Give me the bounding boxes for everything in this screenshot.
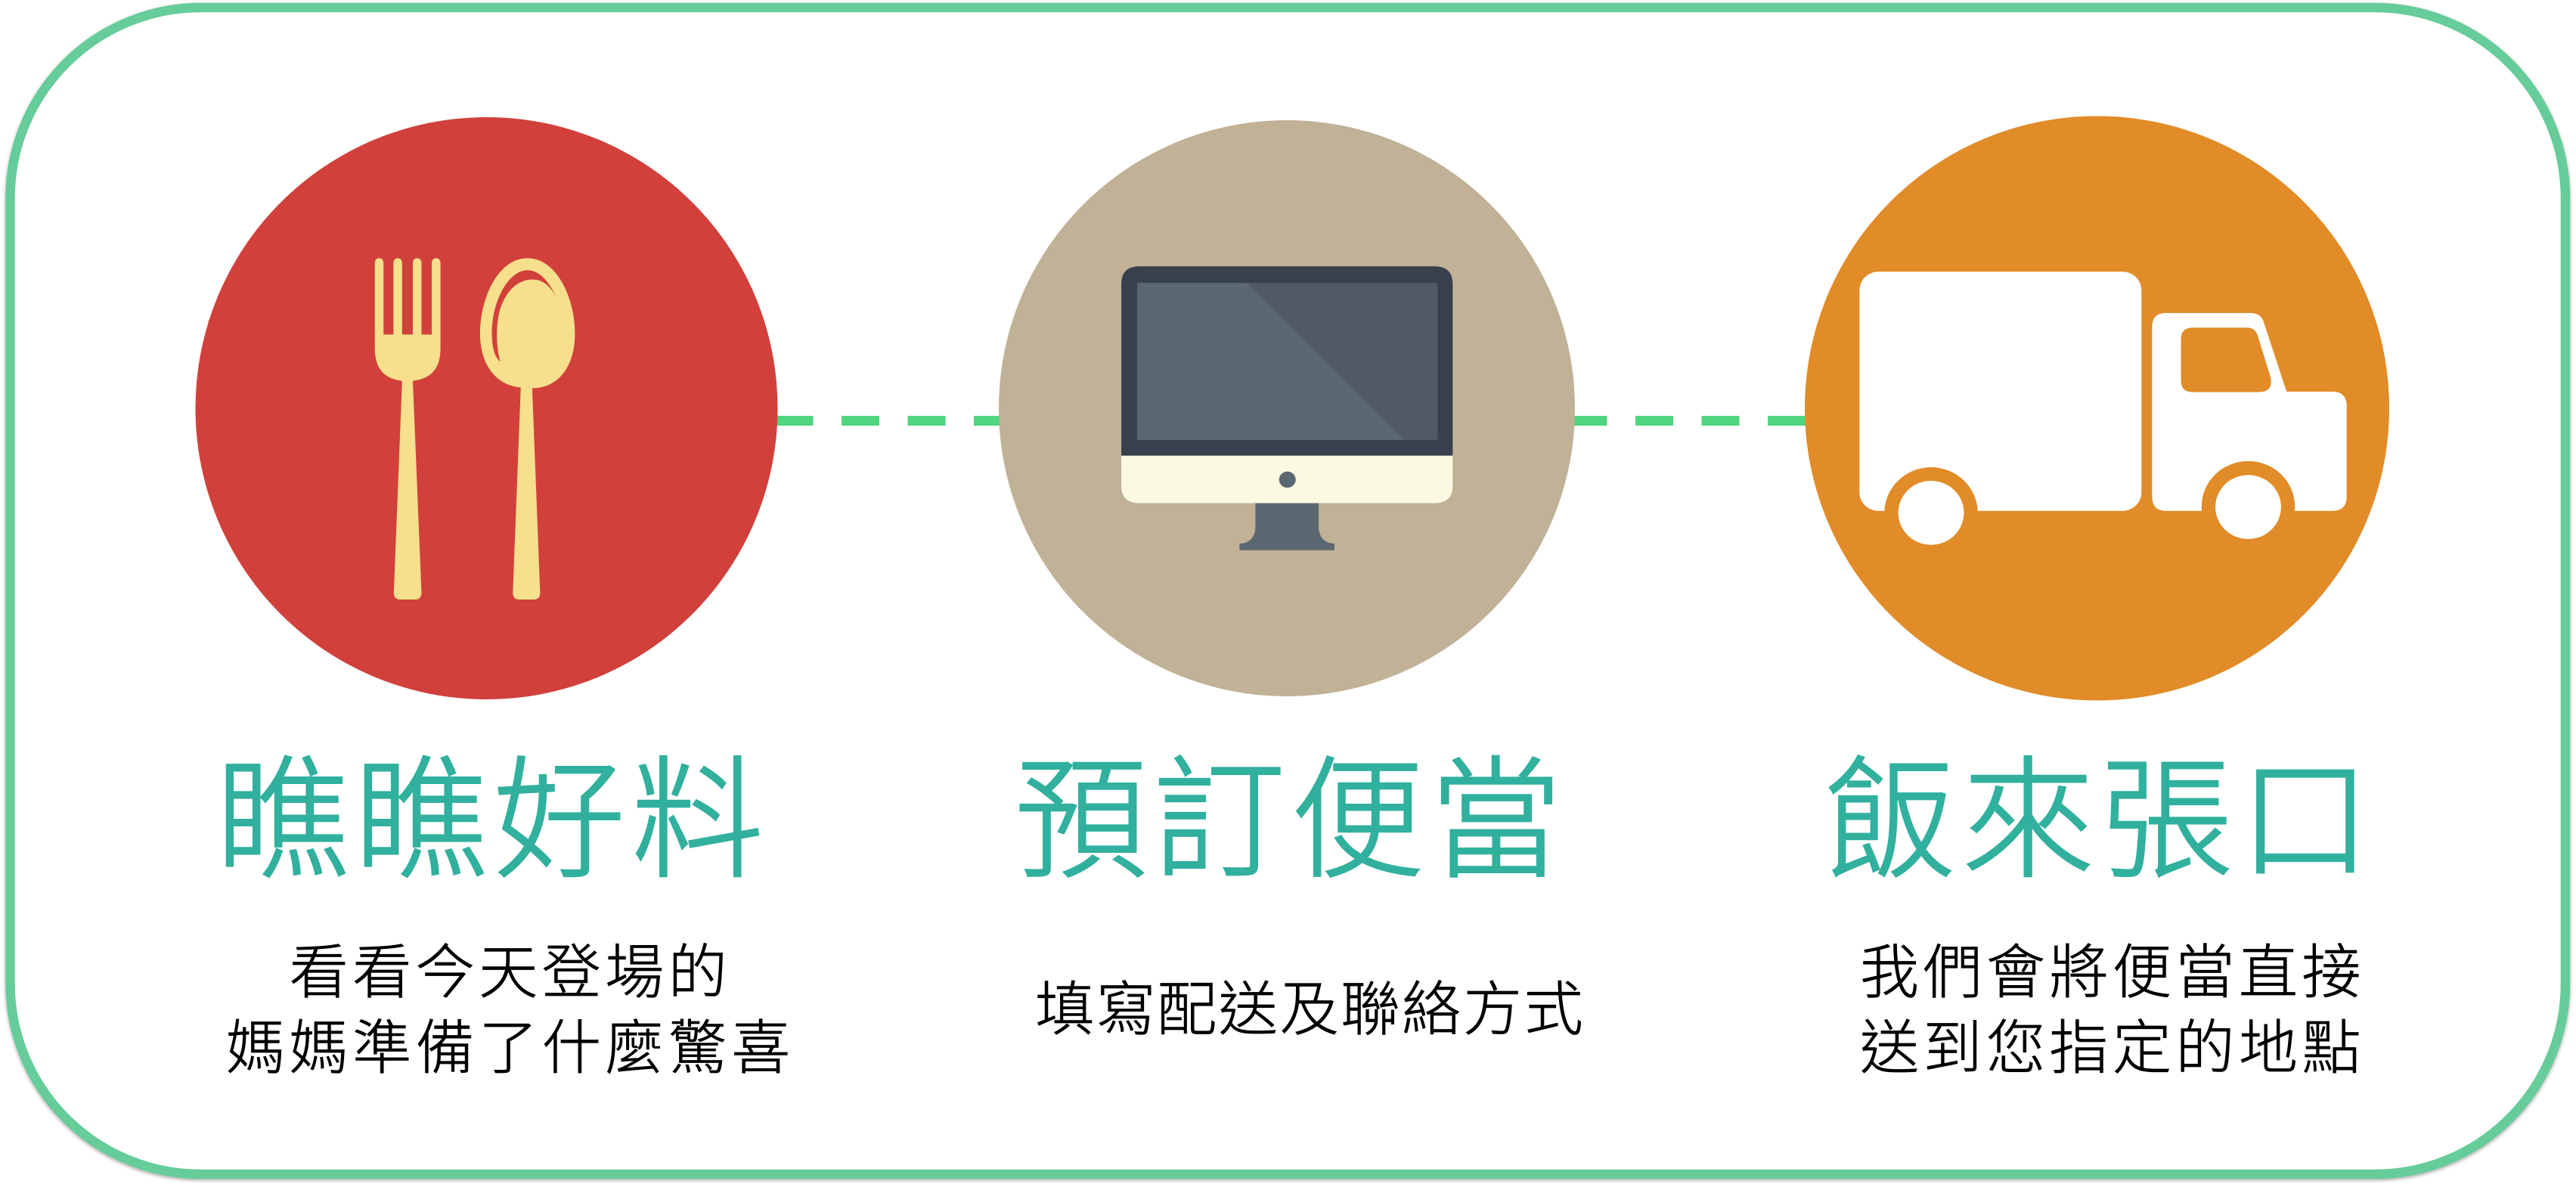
- text block: step 2 description: 填寫配送及聯絡方式: [1035, 976, 1586, 1043]
- heading: step 2: 預訂便當: [1015, 748, 1568, 895]
- text block: step 1 description: [226, 939, 795, 1081]
- icon: delivery truck: [1859, 271, 2347, 558]
- step 3: delivery: [1805, 116, 2389, 1081]
- icon: tan circle: [999, 120, 1575, 696]
- heading: step 3: 飯來張口: [1824, 748, 2377, 895]
- icon: spoon: [480, 259, 575, 600]
- icon: fork: [375, 259, 441, 600]
- dashed connector line: [776, 416, 1809, 426]
- text block: step 3 description: 我們會將便當直接: [1860, 939, 2365, 1006]
- text block: step 1 description: 看看今天登場的: [290, 939, 731, 1006]
- text block: step 1 description: 媽媽準備了什麼驚喜: [226, 1015, 795, 1081]
- heading: step 1: 瞧瞧好料: [216, 748, 770, 895]
- step 1: see the food: [195, 117, 795, 1081]
- text block: step 3 description: 送到您指定的地點: [1860, 1015, 2365, 1081]
- icon: orange circle: [1805, 116, 2389, 700]
- text block: step 3 description: [1860, 939, 2365, 1081]
- icon: red circle: [195, 117, 777, 699]
- icon: desktop monitor: [1121, 266, 1452, 550]
- step 2: order online: [999, 120, 1586, 1043]
